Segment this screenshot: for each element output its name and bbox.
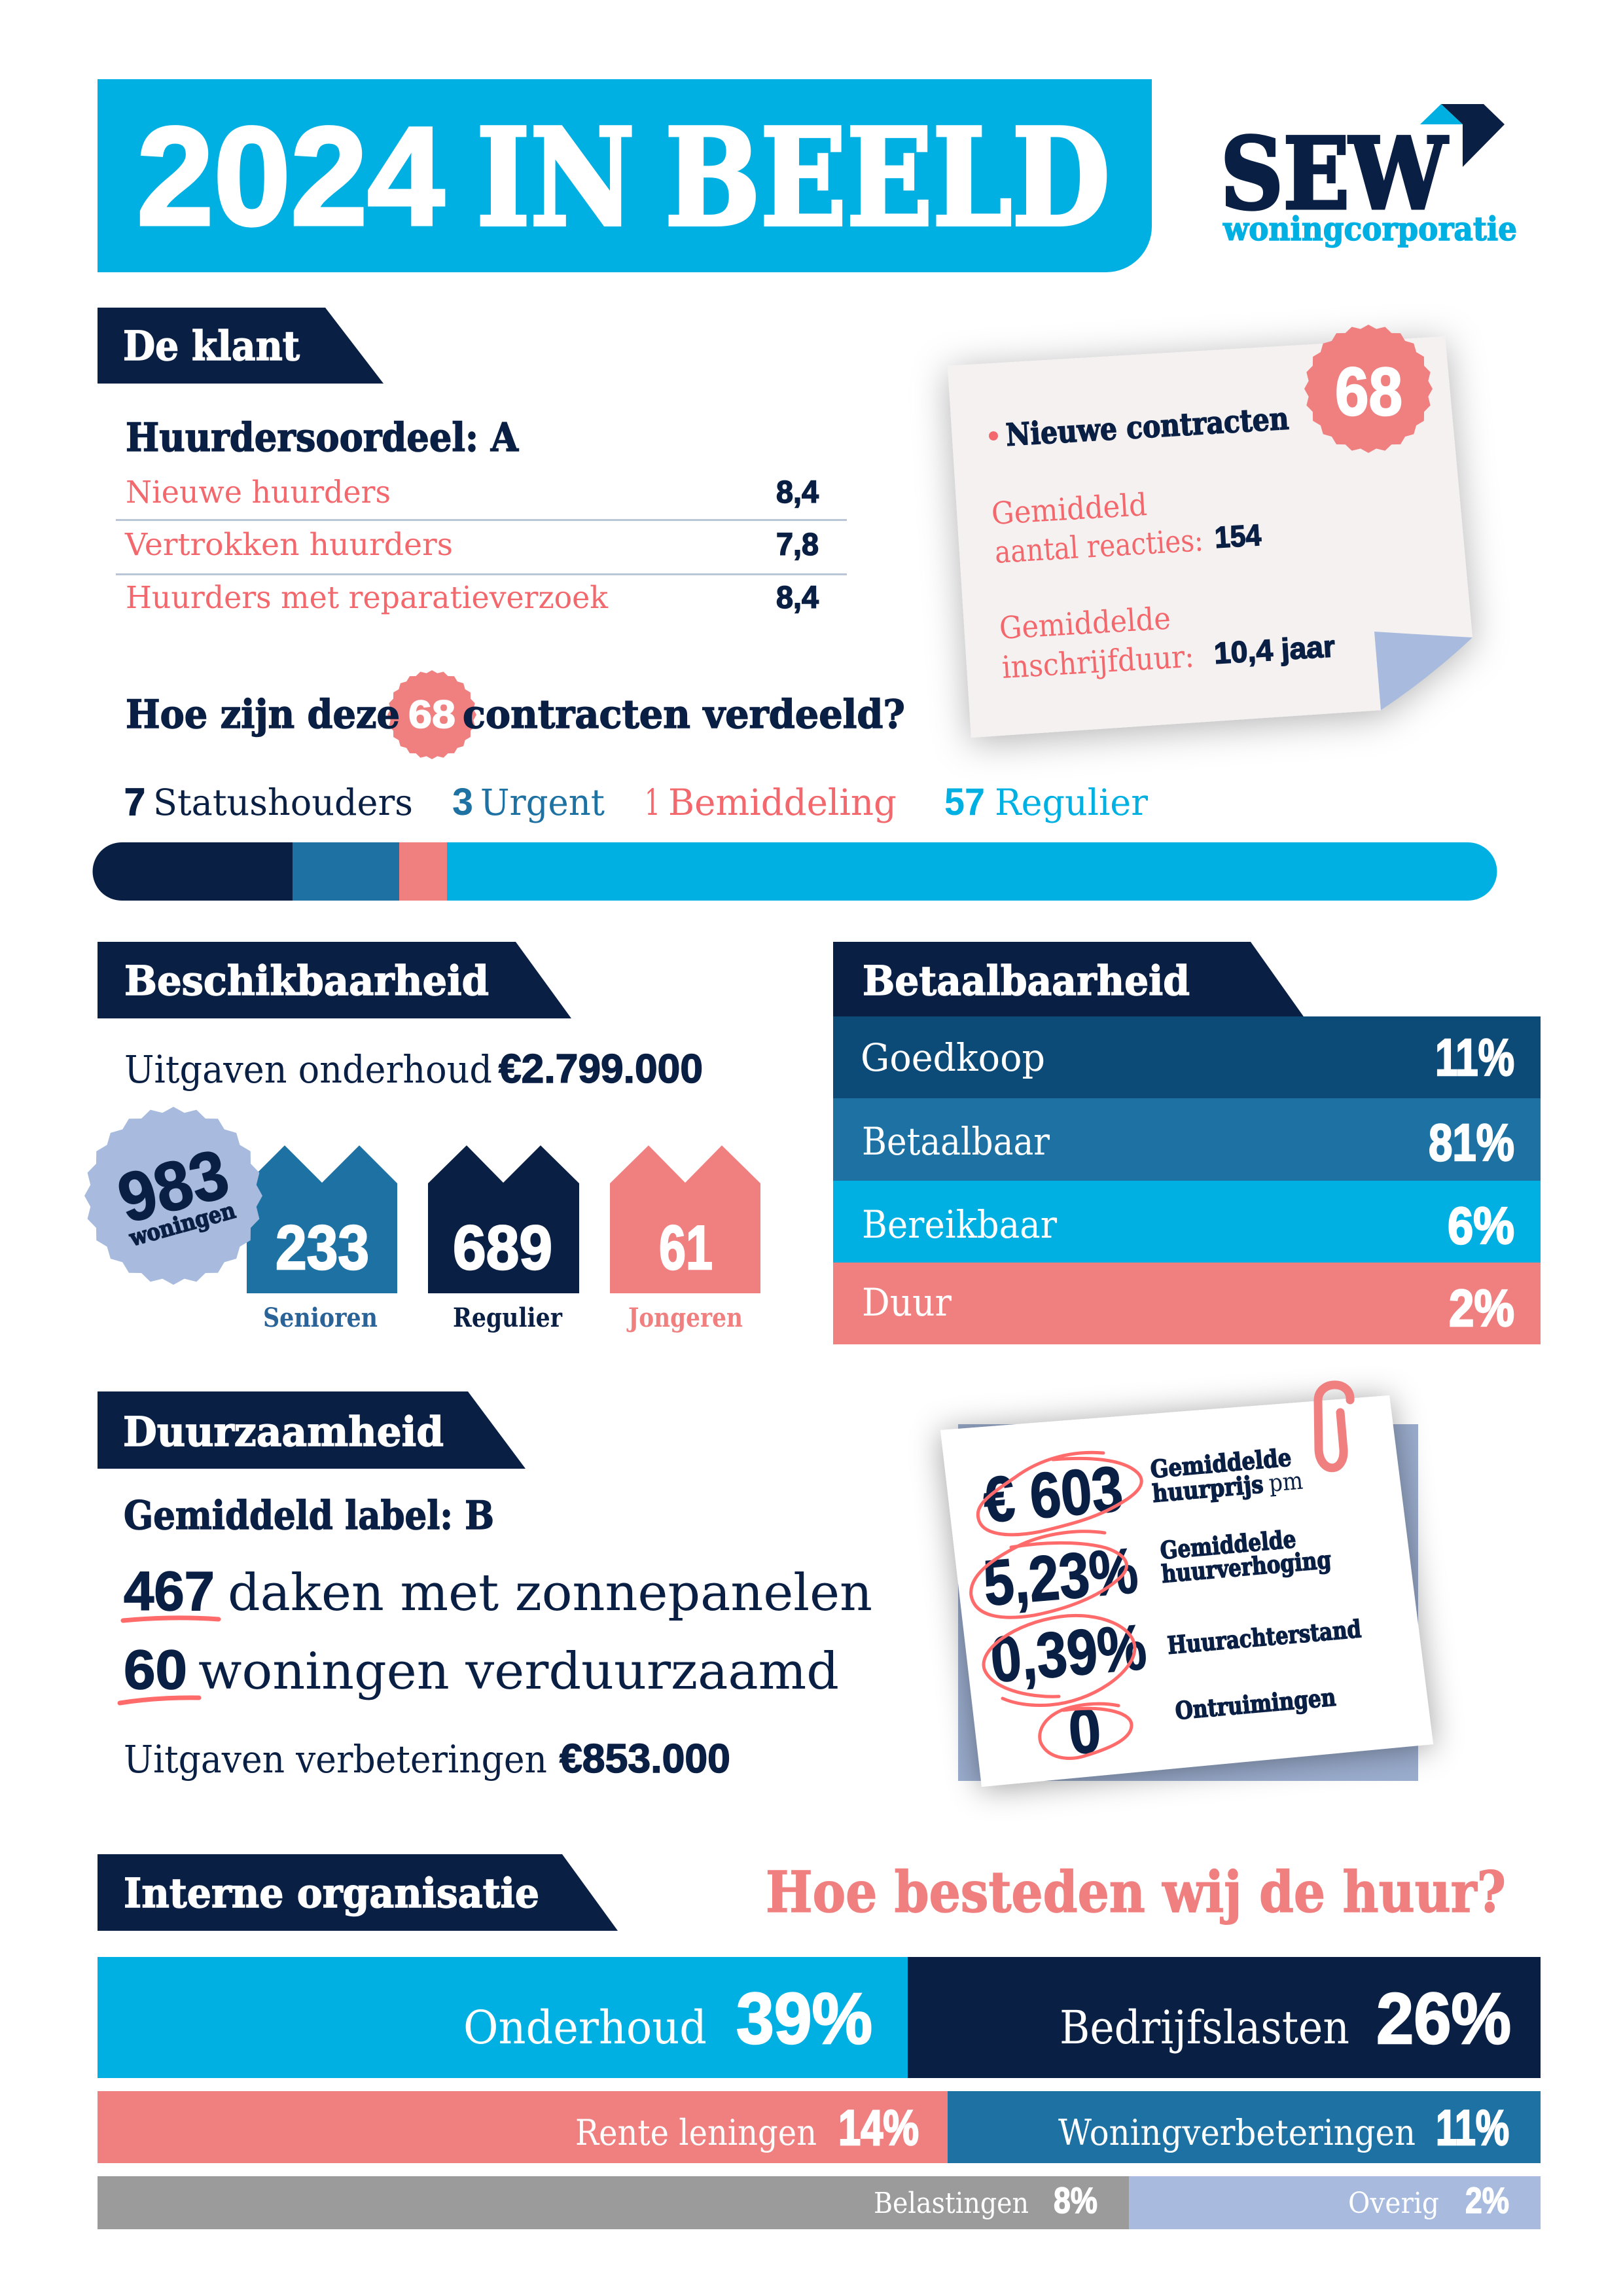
rent spending bars: row 3: Overig	[1348, 2187, 1439, 2220]
sustainability figures: 60	[124, 1639, 187, 1700]
note: rent figures: Gemiddelde	[1159, 1524, 1297, 1565]
logo: SEW woningcorporatie: SEW	[1221, 117, 1448, 232]
note: nieuwe contracten: aantal reacties:	[993, 522, 1204, 571]
rent spending bars: row 2	[98, 2091, 1541, 2163]
maintenance spending: Uitgaven onderhoud	[124, 1047, 492, 1092]
sustainability figures: woningen verduurzaamd	[198, 1642, 839, 1701]
note: rent figures: huurprijs	[1151, 1469, 1264, 1508]
rent spending bars: row 1: 26%	[1376, 1979, 1511, 2059]
section heading: De klant	[98, 308, 383, 384]
note: rent figures	[940, 1385, 1433, 1787]
section heading: Duurzaamheid	[98, 1391, 526, 1469]
badge: 983 woningen: woningen	[126, 1197, 238, 1252]
contract legend: Regulier	[995, 781, 1149, 823]
house: senioren: 233	[276, 1213, 369, 1283]
rent spending bars: row 1: 39%	[736, 1979, 872, 2059]
note: nieuwe contracten: Gemiddeld	[990, 487, 1148, 532]
house: jongeren: Jongeren	[626, 1302, 743, 1333]
sustainability figures: 467	[124, 1560, 215, 1622]
paperclip	[1318, 1385, 1350, 1468]
heading: contract breakdown question: Hoe zijn deze	[126, 692, 400, 738]
rent spending bars: row 2: 14%	[838, 2100, 919, 2156]
sustainability figures: Uitgaven verbeteringen	[124, 1737, 547, 1782]
badge: 68	[1304, 325, 1433, 453]
tenant rating table: Vertrokken huurders	[124, 527, 453, 563]
contract stacked bar	[93, 842, 1497, 901]
note: rent figures: Gemiddelde	[1149, 1443, 1293, 1484]
logo: SEW woningcorporatie	[1221, 104, 1517, 248]
affordability table: Bereikbaar	[862, 1202, 1057, 1247]
contract legend: 3	[452, 781, 473, 823]
tenant rating table: Huurdersoordeel: A	[126, 415, 519, 461]
house: regulier: 689	[453, 1213, 552, 1283]
rent spending bars: row 2: 11%	[1436, 2100, 1509, 2156]
red circled scribbles	[971, 1452, 1141, 1758]
logo: SEW woningcorporatie: woningcorporatie	[1222, 209, 1517, 248]
title banner: IN	[476, 99, 635, 257]
title banner: BEELD	[665, 99, 1110, 257]
sustainability figures: Gemiddeld label: B	[124, 1493, 494, 1539]
house: senioren	[247, 1145, 397, 1333]
rent spending bars: row 3: 8%	[1054, 2179, 1097, 2221]
note: rent figures: € 603	[980, 1452, 1126, 1536]
title banner: 2024	[137, 98, 444, 255]
badge: 68: 68	[1335, 354, 1402, 430]
note: nieuwe contracten	[948, 325, 1472, 738]
title banner	[98, 79, 1152, 272]
rent spending bars: row 1	[98, 1957, 1541, 2078]
tenant rating table: 7,8	[776, 528, 819, 562]
heading: Hoe besteden wij de huur?: Hoe besteden wij de huur?	[766, 1859, 1506, 1926]
note: rent figures: pm	[1268, 1467, 1304, 1498]
affordability table: 11%	[1435, 1028, 1514, 1086]
contract legend: 1	[645, 781, 660, 823]
rent spending bars: row 2: Rente leningen	[575, 2112, 817, 2153]
sustainability figures: daken met zonnepanelen	[228, 1564, 872, 1623]
section heading: Betaalbaarheid: Betaalbaarheid	[863, 957, 1190, 1005]
rent spending bars: row 3: 2%	[1465, 2179, 1509, 2221]
rent spending bars: row 1: Onderhoud	[463, 2001, 707, 2054]
affordability table: 81%	[1429, 1113, 1514, 1172]
affordability table: Goedkoop	[861, 1035, 1045, 1080]
affordability table	[833, 1016, 1541, 1344]
affordability table: 6%	[1448, 1196, 1514, 1255]
note: rent figures: huurverhoging	[1160, 1545, 1332, 1588]
maintenance spending: €2.799.000	[499, 1047, 703, 1092]
contract legend: Bemiddeling	[668, 781, 897, 823]
house: regulier: Regulier	[453, 1302, 563, 1333]
note: rent figures: 0	[1065, 1693, 1104, 1768]
section heading: Beschikbaarheid	[98, 942, 571, 1018]
tenant rating table: 8,4	[776, 475, 819, 510]
note: nieuwe contracten: Nieuwe contracten	[1005, 401, 1290, 454]
sustainability figures: €853.000	[560, 1736, 730, 1782]
note: nieuwe contracten: 154	[1214, 518, 1262, 554]
maintenance spending	[124, 1047, 703, 1092]
affordability table: Duur	[862, 1280, 952, 1325]
note: rent figures: 5,23%	[980, 1534, 1141, 1619]
note: rent figures: Huurachterstand	[1166, 1614, 1363, 1660]
house: senioren: Senioren	[263, 1302, 378, 1333]
affordability table: Betaalbaar	[862, 1119, 1050, 1164]
rent spending bars: row 2: Woningverbeteringen	[1058, 2112, 1416, 2153]
section heading: De klant: De klant	[123, 322, 300, 370]
badge: 983 woningen	[84, 1107, 262, 1285]
rent spending bars: row 3: Belastingen	[874, 2187, 1029, 2220]
affordability table: 2%	[1449, 1279, 1514, 1337]
heading: contract breakdown question: contracten verdeeld?	[463, 692, 905, 738]
note: nieuwe contracten: inschrijfduur:	[1001, 639, 1195, 686]
note: nieuwe contracten: Gemiddelde	[998, 601, 1171, 647]
section heading: Interne organisatie: Interne organisatie	[124, 1869, 539, 1917]
tenant rating table: Huurders met reparatieverzoek	[126, 580, 608, 616]
section heading: Beschikbaarheid: Beschikbaarheid	[124, 957, 489, 1005]
contract legend: Urgent	[480, 781, 605, 823]
note: rent figures: Ontruimingen	[1174, 1683, 1337, 1725]
rent spending bars: row 3	[98, 2176, 1541, 2229]
contract legend	[124, 781, 1149, 823]
section heading: Betaalbaarheid	[833, 942, 1305, 1018]
tenant rating table: Nieuwe huurders	[126, 475, 391, 511]
heading: contract breakdown question: 68	[408, 692, 455, 736]
house: jongeren: 61	[659, 1213, 713, 1283]
section heading: Interne organisatie	[98, 1854, 618, 1931]
note: nieuwe contracten: 10,4 jaar	[1213, 629, 1336, 670]
rent spending bars: row 1: Bedrijfslasten	[1060, 2001, 1349, 2054]
note: rent figures: 0,39%	[988, 1611, 1149, 1696]
tenant rating table: 8,4	[776, 581, 819, 615]
contract legend: 7	[124, 781, 145, 823]
house: regulier	[428, 1145, 579, 1333]
tenant rating table	[116, 415, 847, 616]
contract legend: Statushouders	[153, 781, 413, 823]
contract legend: 57	[944, 781, 985, 823]
heading: contract breakdown question	[126, 670, 905, 759]
badge: 983 woningen: 983	[110, 1135, 236, 1238]
house: jongeren	[610, 1145, 760, 1333]
section heading: Duurzaamheid: Duurzaamheid	[123, 1408, 444, 1456]
sustainability figures	[120, 1493, 872, 1782]
